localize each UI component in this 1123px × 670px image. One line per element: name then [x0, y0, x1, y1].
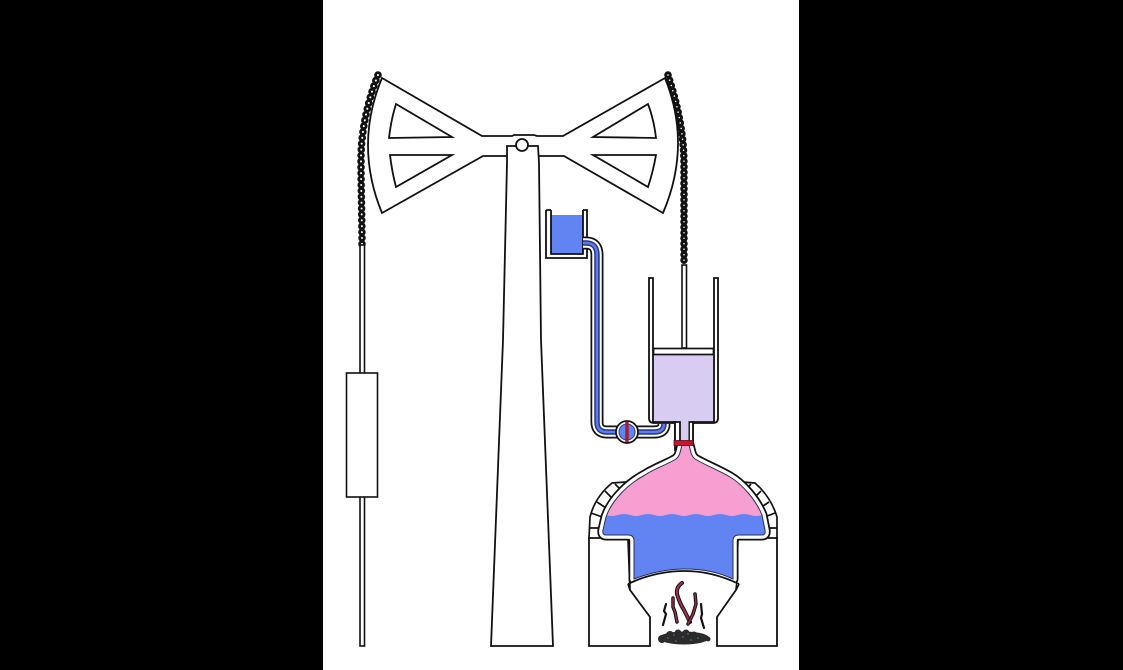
piston rod [682, 265, 686, 348]
steam valve [674, 440, 693, 446]
piston [654, 348, 714, 354]
boiler brick arch [589, 482, 777, 540]
rocking beam [368, 78, 678, 213]
boiler contents: steam and water [603, 446, 765, 578]
injection valve [616, 421, 638, 443]
firebox arch [628, 571, 739, 590]
furnace base [589, 538, 777, 646]
diagram: Newcomen atmospheric beam engine [323, 0, 799, 670]
coal bed [658, 630, 710, 644]
boiler neck [675, 420, 693, 450]
boiler inner edge [603, 445, 765, 579]
cylinder [649, 278, 718, 445]
beam pivot [516, 139, 528, 151]
boiler shell inner wall [603, 445, 765, 579]
water tank [546, 210, 587, 258]
white page panel [323, 0, 799, 670]
left chain [361, 75, 378, 246]
tower support [491, 146, 553, 646]
flames [663, 583, 704, 628]
boiler shell outline [603, 445, 765, 579]
pump rod and counterweight [346, 245, 378, 646]
right chain [668, 75, 684, 263]
feed water pipe [583, 243, 664, 432]
